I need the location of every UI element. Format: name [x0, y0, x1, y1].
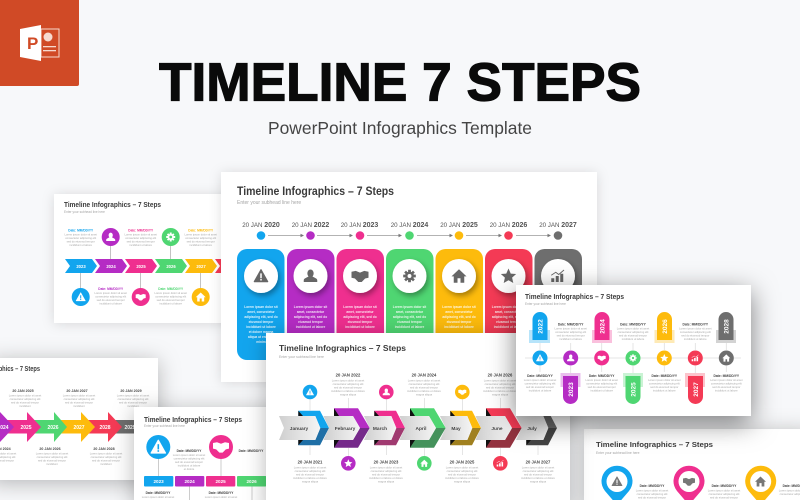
panel: vertical pill timeline slide [516, 285, 751, 416]
lower captions: Lorem ipsum dolor sit amet [710, 378, 743, 382]
connector lines [81, 246, 201, 288]
bar captions: sed do eiusmod tempor [175, 460, 203, 464]
bar captions: consectetur adipiscing elit [174, 456, 205, 460]
column body text: eiusmod tempor [496, 320, 522, 324]
lorem captions: consectetur adipiscing elit [65, 236, 96, 240]
column body text [244, 305, 526, 344]
top month captions: magna aliqua [416, 392, 433, 396]
lower captions: incididunt ut labore [590, 388, 613, 392]
column body text: adipiscing elit, sed do [492, 315, 525, 319]
bottom month captions: consectetur adipiscing elit [523, 469, 554, 473]
column body text: amet, consectetur [495, 310, 523, 314]
chevron year band: 2027 [196, 264, 206, 269]
upper captions: incididunt ut labore [622, 337, 645, 341]
month labels [290, 426, 537, 432]
bottom month captions: incididunt ut labore et dolore [445, 476, 479, 480]
pin captions [636, 484, 800, 500]
year pills: 2024 [599, 319, 606, 334]
top month captions: magna aliqua [340, 392, 357, 396]
lorem captions: consectetur adipiscing elit [95, 294, 126, 298]
column body text: eiusmod tempor [447, 320, 472, 324]
top month captions: sed do eiusmod tempor [486, 386, 514, 390]
arrow band: 2026 [47, 425, 59, 431]
timeline dates: 20 JAN 2020 [242, 222, 280, 229]
column body text: incididunt ut labore [444, 325, 474, 329]
arrow dates and captions: 20 JAN 2025 [12, 389, 34, 393]
lower captions: Date: MM/DD/YY [527, 374, 554, 378]
year pills: 2023 [568, 382, 575, 397]
upper captions: Lorem ipsum dolor sit amet [554, 326, 587, 330]
upper captions: consectetur adipiscing elit [618, 330, 649, 334]
timeline dates: 20 JAN 2025 [440, 222, 478, 229]
lower captions: sed do eiusmod tempor [588, 385, 616, 389]
bar captions: Lorem ipsum dolor sit amet [173, 453, 205, 457]
arrow band [0, 412, 145, 442]
panel: chevron timeline slide: Enter your subhead line here [64, 210, 105, 214]
lorem captions: Lorem ipsum dolor sit amet [184, 232, 217, 236]
panel: main date column slide [221, 172, 597, 382]
bottom month captions: 20 JAN 2021 [298, 460, 323, 464]
month labels: March [373, 426, 387, 432]
column body text: Lorem ipsum dolor sit [492, 305, 526, 309]
top month captions: consectetur adipiscing elit [409, 382, 440, 386]
column body text: eiusmod tempor [249, 320, 274, 324]
arrow dates and captions: sed do eiusmod tempor [65, 400, 93, 404]
column body text: amet, consectetur [247, 310, 275, 314]
lower captions: incididunt ut labore [529, 388, 552, 392]
arrow dates and captions: incididunt [73, 404, 85, 408]
pin captions: sed do eiusmod tempor [638, 496, 666, 500]
arrow dates and captions: consectetur adipiscing elit [10, 397, 41, 401]
bar captions: et dolore [184, 467, 195, 471]
column body text: incididunt ut labore [246, 325, 276, 329]
lorem captions: incididunt ut labore [189, 243, 212, 247]
arrow dates and captions: 20 JAN 2028 [93, 447, 115, 451]
top month captions: 20 JAN 2022 [336, 372, 361, 378]
panel: map pin slide: Enter your subhead line here [596, 451, 640, 455]
title: TIMELINE 7 STEPS [159, 54, 641, 112]
bottom month captions: incididunt ut labore et dolore [293, 476, 327, 480]
arrow band: 2029 [124, 425, 136, 431]
pin captions: Lorem ipsum dolor sit amet [708, 488, 740, 492]
bottom month captions: Lorem ipsum dolor sit amet [522, 466, 554, 470]
top month captions: consectetur adipiscing elit [485, 382, 516, 386]
slide heading: Timeline Infographics – 7 Steps [279, 343, 406, 353]
arrow dates and captions: 20 JAN 2029 [120, 389, 142, 393]
year pills: 2022 [537, 319, 544, 334]
arrow dates and captions: incididunt [19, 404, 31, 408]
top month captions: Lorem ipsum dolor sit amet [484, 378, 516, 382]
panel: map pin slide [584, 429, 800, 500]
bottom month captions: 20 JAN 2025 [450, 460, 475, 464]
bottom month captions [293, 460, 555, 484]
lorem captions: incididunt ut labore [99, 302, 122, 306]
pin captions: sed do eiusmod tempor [710, 496, 738, 500]
arrow dates and captions: Lorem ipsum dolor sit amet [36, 452, 68, 456]
year pills: 2028 [723, 319, 730, 334]
lorem captions: incididunt ut labore [69, 243, 92, 247]
top month icons [303, 385, 470, 399]
icon: PowerPoint logo badge [0, 0, 79, 86]
arrow dates and captions: incididunt [46, 462, 58, 466]
bar captions: Date: MM/DD/YY [239, 449, 264, 453]
arrow dates and captions: consectetur adipiscing elit [37, 455, 68, 459]
bottom month icons [341, 456, 508, 471]
timeline dates: 20 JAN 2026 [490, 222, 527, 229]
bottom month captions: Lorem ipsum dolor sit amet [446, 466, 478, 470]
arrow dates and captions: Lorem ipsum dolor sit amet [90, 452, 122, 456]
upper captions: Lorem ipsum dolor sit amet [679, 326, 712, 330]
lorem captions: sed do eiusmod tempor [187, 240, 215, 244]
chevron year band: 2024 [106, 264, 116, 269]
column body text: Lorem ipsum dolor sit [343, 305, 378, 309]
lower captions: consectetur adipiscing elit [525, 382, 556, 386]
lower captions: sed do eiusmod tempor [712, 385, 740, 389]
lorem captions: sed do eiusmod tempor [67, 240, 95, 244]
bar captions: Date: MM/DD/YY [177, 449, 202, 453]
bar captions: Lorem ipsum dolor sit amet [205, 495, 237, 499]
column body text: adipiscing elit, sed do [393, 315, 426, 319]
panel: vertical pill timeline slide: Enter your subhead line here [525, 302, 566, 306]
bar captions: Date: MM/DD/YY [209, 491, 234, 495]
panel: chevron timeline slide [54, 194, 235, 323]
bottom month captions: incididunt ut labore et dolore [521, 476, 555, 480]
slide heading: Timeline Infographics – 7 Steps [237, 186, 394, 198]
upper captions: sed do eiusmod tempor [557, 334, 585, 338]
column body text: minim [256, 340, 266, 344]
timeline icons [532, 350, 734, 366]
column body text: eiusmod tempor [348, 320, 373, 324]
top month captions: sed do eiusmod tempor [334, 386, 362, 390]
chevron year band: 2025 [136, 264, 146, 269]
lorem captions: Lorem ipsum dolor sit amet [64, 232, 97, 236]
year bars [144, 476, 266, 486]
column body text: amet, consectetur [297, 310, 325, 314]
lower captions: Lorem ipsum dolor sit amet [524, 378, 556, 382]
lower captions: Date: MM/DD/YY [589, 374, 615, 378]
arrow dates and captions: sed do eiusmod tempor [11, 400, 39, 404]
arrow dates and captions: sed do eiusmod tempor [119, 400, 147, 404]
bottom month captions: magna aliqua [530, 480, 547, 484]
arrow dates and captions: sed do eiusmod tempor [38, 458, 66, 462]
month labels: June [491, 426, 503, 432]
year bars: 2026 [246, 479, 257, 484]
bottom month captions: sed do eiusmod tempor [524, 472, 552, 476]
column body text: adipiscing elit, sed do [343, 315, 377, 319]
timeline dates [242, 222, 577, 229]
lower captions: sed do eiusmod tempor [650, 385, 678, 389]
arrow dates and captions: 20 JAN 2026 [39, 447, 61, 451]
bottom month captions: consectetur adipiscing elit [447, 469, 478, 473]
lorem captions: consectetur adipiscing elit [155, 294, 186, 298]
panel: arrow timeline slide [0, 358, 158, 480]
top month captions: 20 JAN 2024 [412, 372, 437, 378]
bottom month captions: Lorem ipsum dolor sit amet [294, 466, 326, 470]
lorem captions: Lorem ipsum dolor sit amet [94, 291, 127, 295]
pin captions: consectetur adipiscing elit [637, 492, 668, 496]
subtitle: PowerPoint Infographics Template [268, 118, 532, 138]
column body text: et dolore magna [249, 330, 274, 334]
date captions: Date: MM/DD/YY [68, 228, 94, 232]
column body text: Lorem ipsum dolor sit [244, 305, 279, 309]
date captions: Date: MM/DD/YY [188, 228, 214, 232]
bottom icons [72, 288, 210, 306]
timeline dates: 20 JAN 2024 [391, 222, 428, 229]
bottom month captions: consectetur adipiscing elit [371, 469, 402, 473]
arrow dates and captions: incididunt [100, 462, 112, 466]
upper captions: incididunt ut labore [684, 337, 707, 341]
month labels: May [451, 426, 461, 432]
lorem captions: sed do eiusmod tempor [127, 240, 155, 244]
bottom month captions: sed do eiusmod tempor [296, 472, 324, 476]
column body text: incididunt ut labore [395, 325, 425, 329]
date captions: Date: MM/DD/YY [158, 287, 184, 291]
year pills [532, 312, 734, 404]
timeline dates: 20 JAN 2022 [292, 222, 329, 229]
column body text: adipiscing elit, sed do [294, 315, 327, 319]
grey month chevrons [279, 416, 548, 440]
arrow band: 2025 [20, 425, 32, 431]
pin captions: Date: MM/DD/YY [640, 484, 665, 488]
date captions [68, 228, 214, 291]
column body text: Lorem ipsum dolor sit [393, 305, 427, 309]
arrow dates and captions: Lorem ipsum dolor sit amet [9, 394, 41, 398]
column body text: Lorem ipsum dolor sit [442, 305, 477, 309]
column body text: amet, consectetur [396, 310, 424, 314]
chevron year band: 2026 [166, 264, 176, 269]
arrow dates and captions: incididunt [127, 404, 139, 408]
timeline arrows [268, 234, 549, 236]
month labels: July [527, 426, 537, 432]
column body text: eiusmod tempor [298, 320, 324, 324]
step columns [237, 249, 582, 360]
panel: month chevrons slide [266, 333, 570, 500]
month labels: January [290, 426, 309, 432]
top month captions: incididunt ut labore et dolore [407, 389, 441, 393]
lower captions: incididunt ut labore [653, 388, 676, 392]
pin captions: Date: MM/DD/YY [712, 484, 737, 488]
lorem captions: sed do eiusmod tempor [97, 298, 125, 302]
map pins [601, 466, 776, 500]
column body text: adipiscing elit, sed do [442, 315, 476, 319]
month labels: April [416, 426, 426, 432]
lower captions: consectetur adipiscing elit [711, 382, 742, 386]
year pills: 2027 [693, 382, 700, 397]
panel: main date column slide: Enter your subhead line here [237, 200, 301, 206]
arrow dates and captions: Lorem ipsum dolor sit amet [63, 394, 95, 398]
column body text: incididunt ut labore [296, 325, 326, 329]
lorem captions: Lorem ipsum dolor sit amet [154, 291, 187, 295]
chevron year band [65, 259, 235, 273]
upper captions: Lorem ipsum dolor sit amet [617, 326, 649, 330]
lower captions: Lorem ipsum dolor sit amet [648, 378, 681, 382]
panel: year bars slide [134, 407, 294, 500]
bottom month captions: sed do eiusmod tempor [372, 472, 400, 476]
coloured chevrons [298, 408, 557, 448]
top month captions: 20 JAN 2026 [488, 372, 513, 378]
date captions: Date: MM/DD/YY [98, 287, 124, 291]
lower captions: Date: MM/DD/YY [651, 374, 678, 378]
arrow dates and captions: Lorem ipsum dolor sit amet [117, 394, 149, 398]
upper captions: consectetur adipiscing elit [555, 330, 586, 334]
column body text: eiusmod tempor [397, 320, 423, 324]
upper captions: sed do eiusmod tempor [681, 334, 709, 338]
slide heading: Timeline Infographics – 7 Steps [596, 440, 713, 449]
lower captions: incididunt ut labore [715, 388, 738, 392]
slide heading: Timeline Infographics – 7 Steps [144, 415, 242, 424]
column body text: aliqua ut enim ad [248, 335, 274, 339]
top month captions: incididunt ut labore et dolore [331, 389, 365, 393]
upper captions: consectetur adipiscing elit [680, 330, 711, 334]
top icons [102, 228, 180, 246]
panel: year bars slide: Enter your subhead line here [144, 424, 185, 428]
bar captions [142, 449, 264, 499]
year bars: 2023 [153, 479, 164, 484]
lower captions: Lorem ipsum dolor sit amet [585, 378, 618, 382]
bottom month captions: sed do eiusmod tempor [448, 472, 476, 476]
arrow dates and captions: consectetur adipiscing elit [64, 397, 95, 401]
timeline dates: 20 JAN 2027 [539, 222, 577, 229]
top month captions [331, 372, 517, 396]
arrow dates and captions: consectetur adipiscing elit [118, 397, 149, 401]
column body text: incididunt ut labore [494, 325, 524, 329]
timeline dates: 20 JAN 2023 [341, 222, 378, 229]
year pills: 2026 [662, 319, 669, 334]
bar captions: incididunt ut labore [178, 464, 201, 468]
top month captions: magna aliqua [492, 392, 509, 396]
lower captions: Date: MM/DD/YY [713, 374, 740, 378]
upper captions: Date: MM/DD/YY [558, 322, 584, 326]
lorem captions: incididunt ut labore [159, 302, 182, 306]
arrow band: 2028 [99, 425, 111, 431]
month labels: February [335, 426, 356, 432]
icon circles [244, 259, 575, 293]
bottom month captions: 20 JAN 2027 [526, 460, 551, 464]
year bars: 2024 [184, 479, 195, 484]
slide heading: Timeline Infographics – 7 Steps [64, 200, 161, 209]
slide heading: Timeline Infographics – 7 Steps [525, 292, 624, 301]
timeline dots [257, 231, 562, 240]
column body text: amet, consectetur [346, 310, 374, 314]
upper captions: sed do eiusmod tempor [619, 334, 647, 338]
bar captions: Lorem ipsum dolor sit amet [142, 495, 174, 499]
centre line [525, 343, 741, 373]
lower captions: sed do eiusmod tempor [526, 385, 554, 389]
bottom month captions: 20 JAN 2023 [374, 460, 399, 464]
chevron year band: 2023 [76, 264, 86, 269]
upper captions: Date: MM/DD/YY [620, 322, 647, 326]
column body text: adipiscing elit, sed do [244, 315, 278, 319]
lower captions [524, 374, 743, 392]
arrow dates and captions [0, 389, 149, 466]
lorem captions [64, 232, 217, 306]
year bars: 2025 [215, 479, 226, 484]
arrow dates and captions: consectetur adipiscing elit [91, 455, 122, 459]
arrow band: 2027 [73, 425, 85, 431]
pin captions: consectetur adipiscing elit [709, 492, 740, 496]
upper captions: incididunt ut labore [559, 337, 582, 341]
bottom month captions: Lorem ipsum dolor sit amet [370, 466, 402, 470]
column body text: incididunt ut labore [345, 325, 375, 329]
lorem captions: incididunt ut labore [129, 243, 152, 247]
top month captions: Lorem ipsum dolor sit amet [408, 378, 440, 382]
top month captions: consectetur adipiscing elit [333, 382, 364, 386]
lorem captions: Lorem ipsum dolor sit amet [124, 232, 157, 236]
arrow dates and captions: 20 JAN 2027 [66, 389, 88, 393]
lower captions: consectetur adipiscing elit [649, 382, 680, 386]
large icons [146, 435, 233, 459]
column body text: amet, consectetur [445, 310, 473, 314]
arrow dates and captions: sed do eiusmod tempor [92, 458, 120, 462]
icon: PowerPoint logo badge: P [27, 34, 38, 53]
upper captions [554, 322, 712, 341]
bottom month captions: consectetur adipiscing elit [295, 469, 326, 473]
top month captions: incididunt ut labore et dolore [483, 389, 517, 393]
year pills: 2025 [630, 382, 637, 397]
lower captions: consectetur adipiscing elit [586, 382, 617, 386]
lorem captions: sed do eiusmod tempor [157, 298, 185, 302]
panel: month chevrons slide: Enter your subhead line here [279, 355, 324, 359]
pin captions: Lorem ipsum dolor sit amet [636, 488, 668, 492]
pale pill backings [529, 330, 736, 387]
top month captions: sed do eiusmod tempor [410, 386, 438, 390]
date captions: Date: MM/DD/YY [128, 228, 154, 232]
column body text: Lorem ipsum dolor sit [294, 305, 328, 309]
bottom month captions: magna aliqua [454, 480, 471, 484]
bottom month captions: incididunt ut labore et dolore [369, 476, 403, 480]
bottom month captions: magna aliqua [302, 480, 319, 484]
lorem captions: consectetur adipiscing elit [125, 236, 156, 240]
lorem captions: consectetur adipiscing elit [185, 236, 216, 240]
bottom month captions: magna aliqua [378, 480, 395, 484]
bar captions: Date: MM/DD/YY [146, 491, 171, 495]
top month captions: Lorem ipsum dolor sit amet [332, 378, 364, 382]
upper captions: Date: MM/DD/YY [682, 322, 709, 326]
